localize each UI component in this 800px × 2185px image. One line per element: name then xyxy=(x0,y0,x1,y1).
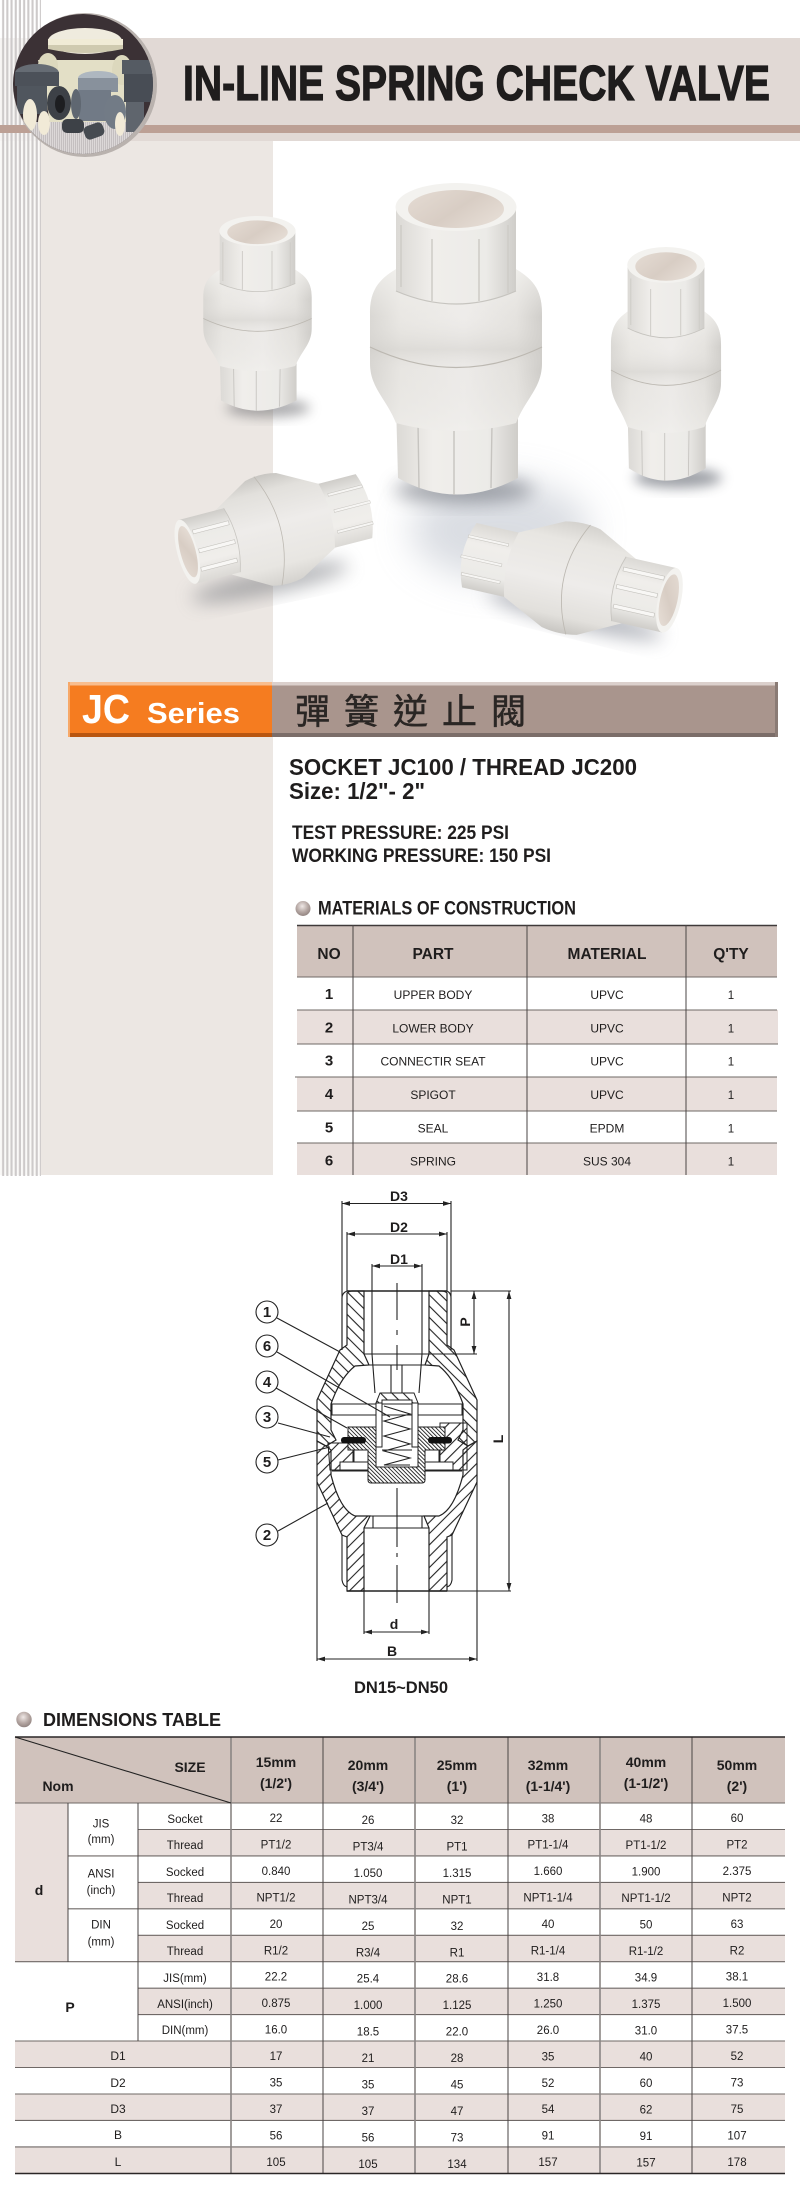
panel: header band xyxy=(0,38,800,141)
row: JIS socket: 26 xyxy=(362,1815,374,1827)
header row labels: 20mm xyxy=(348,1757,388,1773)
row: D2: 52 xyxy=(542,2078,554,2090)
left label columns: ANSI(inch) xyxy=(157,1999,213,2011)
row 3: 3 xyxy=(325,1053,333,1070)
soft shadows under valves xyxy=(189,399,722,648)
row: D2 xyxy=(270,2078,743,2092)
row: D1: 28 xyxy=(451,2053,463,2065)
row: D2: 60 xyxy=(640,2078,652,2090)
row: JIS socket xyxy=(270,1813,743,1827)
row 6: SUS 304 xyxy=(583,1155,631,1169)
header row labels: 40mm xyxy=(626,1754,666,1770)
left label columns: d xyxy=(35,1882,43,1898)
header row labels: (1-1/4') xyxy=(526,1778,570,1794)
row: JIS socket: 22 xyxy=(270,1813,282,1825)
row: DIN socked: 50 xyxy=(640,1920,652,1932)
row 4: SPIGOT xyxy=(410,1088,456,1102)
part number callouts: 3 xyxy=(263,1409,271,1426)
row: JIS thread: PT2 xyxy=(726,1839,748,1851)
dimension lines xyxy=(317,1188,511,1661)
row: DIN thread: R1/2 xyxy=(264,1945,288,1957)
row: JIS socket: 60 xyxy=(731,1813,743,1825)
row: D3: 37 xyxy=(362,2106,374,2118)
row 1 xyxy=(325,986,734,1003)
row 2: 2 xyxy=(325,1019,333,1036)
row: P ANSI: 1.500 xyxy=(723,1998,751,2010)
row: D2: 45 xyxy=(451,2080,463,2092)
left label columns: P xyxy=(65,1999,75,2015)
row 1: UPPER BODY xyxy=(394,988,472,1002)
left label columns: ANSI xyxy=(88,1869,114,1881)
row: DIN socked: 63 xyxy=(731,1919,743,1931)
row 6: SPRING xyxy=(410,1155,456,1169)
row: JIS thread: PT1-1/2 xyxy=(626,1840,666,1852)
row: DIN socked xyxy=(270,1919,743,1933)
row: ANSI socked: 1.660 xyxy=(534,1866,562,1878)
row: ANSI thread: NPT3/4 xyxy=(348,1894,388,1906)
row: D1: 40 xyxy=(640,2052,652,2064)
table shading xyxy=(15,1737,785,2173)
row: JIS thread: PT1-1/4 xyxy=(528,1840,569,1852)
row: ANSI socked xyxy=(262,1866,751,1880)
row: B: 91 xyxy=(542,2131,554,2143)
row: B xyxy=(270,2130,747,2144)
left label columns: (inch) xyxy=(87,1885,116,1897)
header row labels: (3/4') xyxy=(352,1778,384,1794)
left label columns: Socket xyxy=(167,1814,203,1826)
row: D3: 62 xyxy=(640,2105,652,2117)
table header row xyxy=(317,946,749,963)
row: P DIN: 16.0 xyxy=(265,2025,287,2037)
row 3 xyxy=(325,1053,734,1070)
row: ANSI socked: 1.050 xyxy=(354,1868,382,1880)
table header row: Q'TY xyxy=(713,946,749,963)
row: P JIS xyxy=(265,1972,748,1986)
row 5: 1 xyxy=(728,1123,734,1135)
row: DIN thread xyxy=(264,1945,744,1959)
dimension lines: D2 xyxy=(390,1219,408,1235)
row: ANSI thread: NPT1-1/4 xyxy=(523,1893,573,1905)
left label columns: Thread xyxy=(167,1893,203,1905)
header row labels: (1/2') xyxy=(260,1775,292,1791)
row: D3: 47 xyxy=(451,2106,463,2118)
row: DIN socked: 40 xyxy=(542,1919,554,1931)
row 2 xyxy=(325,1019,734,1036)
row 5: SEAL xyxy=(418,1121,449,1135)
part number callouts: 6 xyxy=(263,1338,271,1355)
banner: orange JC Series: JC xyxy=(82,686,130,732)
valve: large upright xyxy=(370,183,542,495)
row 1: 1 xyxy=(325,986,333,1003)
row: ANSI thread: NPT2 xyxy=(722,1892,752,1904)
dimension lines: L xyxy=(490,1434,506,1443)
row: P JIS: 31.8 xyxy=(537,1972,559,1984)
spec text block: SOCKET JC100 / THREAD JC200 xyxy=(289,754,637,780)
series banner xyxy=(68,682,778,737)
left label columns: Thread xyxy=(167,1840,203,1852)
row: D1: 17 xyxy=(270,2051,282,2063)
row: P DIN: 22.0 xyxy=(446,2027,468,2039)
row: P ANSI: 1.375 xyxy=(632,1999,660,2011)
row 4: 4 xyxy=(325,1086,334,1103)
row 2: UPVC xyxy=(590,1021,624,1035)
dimension lines: P xyxy=(457,1317,473,1327)
row: DIN socked: 25 xyxy=(362,1921,374,1933)
row: D2: 35 xyxy=(270,2078,282,2090)
row: P DIN: 31.0 xyxy=(635,2025,657,2037)
row: ANSI socked: 1.900 xyxy=(632,1867,660,1879)
spec text block xyxy=(289,754,637,867)
row: JIS socket: 38 xyxy=(542,1813,554,1825)
row: L: 105 xyxy=(266,2157,286,2169)
dimensions table xyxy=(15,1737,785,2174)
left label columns: (mm) xyxy=(88,1834,115,1846)
row 3: CONNECTIR SEAT xyxy=(380,1055,486,1069)
row: D3 xyxy=(270,2104,743,2118)
row 3: 1 xyxy=(728,1057,734,1069)
header row labels xyxy=(42,1754,757,1794)
left label columns: B xyxy=(114,2128,122,2142)
banner: orange JC Series: Series xyxy=(147,698,240,730)
row: DIN socked: 20 xyxy=(270,1919,282,1931)
row: D3: 75 xyxy=(731,2104,743,2116)
row: P JIS: 25.4 xyxy=(357,1974,380,1986)
row 6 xyxy=(325,1153,734,1170)
row: DIN thread: R3/4 xyxy=(356,1947,381,1959)
row 5: 5 xyxy=(325,1119,333,1136)
left label columns: Thread xyxy=(167,1946,203,1958)
spec text block: TEST PRESSURE: 225 PSI xyxy=(292,823,509,844)
row: B: 56 xyxy=(362,2132,374,2144)
row: P DIN: 18.5 xyxy=(357,2027,379,2039)
left label columns: D1 xyxy=(110,2049,126,2063)
row: DIN thread: R2 xyxy=(730,1945,744,1957)
dimension lines: D1 xyxy=(390,1251,408,1267)
row: DIN socked: 32 xyxy=(451,1921,463,1933)
dimension lines: B xyxy=(387,1643,397,1659)
panel: left beige column xyxy=(0,141,273,1175)
row: L: 134 xyxy=(447,2159,467,2171)
header row labels: 25mm xyxy=(437,1757,477,1773)
left label columns xyxy=(35,1814,213,2169)
banner: grey-brown Chinese title: 彈簧逆止閥 xyxy=(295,693,526,732)
left label columns: D3 xyxy=(110,2102,126,2116)
row: B: 91 xyxy=(640,2131,652,2143)
row: JIS thread: PT1/2 xyxy=(261,1839,291,1851)
drawing caption: DN15~DN50 xyxy=(354,1679,448,1697)
left label columns: Socked xyxy=(166,1920,204,1932)
header row labels: 32mm xyxy=(528,1757,568,1773)
table header row: NO xyxy=(317,946,341,963)
valve: small upright xyxy=(203,216,312,411)
header row labels: SIZE xyxy=(174,1759,206,1775)
header row labels: (2') xyxy=(727,1778,747,1794)
part number callouts: 2 xyxy=(263,1527,271,1544)
banner: grey-brown Chinese title xyxy=(272,682,778,737)
row: JIS thread: PT1 xyxy=(446,1841,468,1853)
row 5: EPDM xyxy=(590,1121,624,1135)
header row labels: 50mm xyxy=(717,1757,757,1773)
row: P ANSI xyxy=(262,1998,751,2012)
dimension lines: D3 xyxy=(390,1188,408,1204)
row: D1 xyxy=(270,2051,743,2065)
row: D2: 35 xyxy=(362,2080,374,2092)
row 3: UPVC xyxy=(590,1055,624,1069)
row 2: LOWER BODY xyxy=(392,1021,474,1035)
row 4: UPVC xyxy=(590,1088,624,1102)
row: ANSI socked: 1.315 xyxy=(443,1868,471,1880)
row: ANSI socked: 2.375 xyxy=(723,1866,751,1878)
heading: materials of construction: MATERIALS OF CONSTRUCTION xyxy=(318,898,576,920)
spring xyxy=(384,1406,410,1465)
row: D1: 35 xyxy=(542,2051,554,2063)
header strip xyxy=(0,125,800,133)
left label columns: DIN(mm) xyxy=(162,2025,208,2037)
table header row: PART xyxy=(412,946,454,963)
row: L: 178 xyxy=(727,2157,747,2169)
header row labels: 15mm xyxy=(256,1754,296,1770)
row: JIS socket: 48 xyxy=(640,1814,652,1826)
row: D1: 52 xyxy=(731,2051,743,2063)
panel: vertical stripe column xyxy=(0,0,41,1176)
row: ANSI thread: NPT1/2 xyxy=(256,1892,296,1904)
left label columns: JIS xyxy=(93,1819,110,1831)
row: DIN thread: R1-1/2 xyxy=(629,1946,663,1958)
banner: orange JC Series xyxy=(68,682,272,737)
row: D2: 73 xyxy=(731,2078,743,2090)
table header row: MATERIAL xyxy=(568,946,646,963)
left label columns: L xyxy=(115,2155,122,2169)
row: D1: 21 xyxy=(362,2053,374,2065)
seals xyxy=(341,1437,452,1444)
valve: lying right xyxy=(449,499,693,658)
row: L xyxy=(266,2157,747,2171)
left label columns: Socked xyxy=(166,1867,204,1879)
row: ANSI socked: 0.840 xyxy=(262,1866,290,1878)
row: P DIN: 37.5 xyxy=(726,2025,748,2037)
row: P JIS: 22.2 xyxy=(265,1972,287,1984)
row: B: 107 xyxy=(727,2130,747,2142)
valve: lying left xyxy=(163,450,385,609)
part number callouts: 4 xyxy=(263,1374,272,1391)
header product photo circle xyxy=(10,10,160,160)
left label columns: JIS(mm) xyxy=(163,1973,207,1985)
row: DIN thread: R1-1/4 xyxy=(531,1946,566,1958)
row: P DIN xyxy=(265,2025,748,2039)
row 6: 6 xyxy=(325,1153,333,1170)
row: D3: 54 xyxy=(542,2104,555,2116)
row: P JIS: 38.1 xyxy=(726,1972,748,1984)
row 6: 1 xyxy=(728,1157,734,1169)
left label columns: DIN xyxy=(91,1920,111,1932)
row: P ANSI: 1.125 xyxy=(443,2000,471,2012)
left label columns: (mm) xyxy=(88,1937,115,1949)
row: JIS thread xyxy=(261,1839,748,1853)
row: JIS thread: PT3/4 xyxy=(353,1841,384,1853)
row: P JIS: 34.9 xyxy=(635,1972,657,1984)
row: B: 73 xyxy=(451,2132,463,2144)
header row labels: Nom xyxy=(42,1778,74,1794)
row: ANSI thread: NPT1 xyxy=(442,1894,472,1906)
header row labels: (1') xyxy=(447,1778,467,1794)
row 4 xyxy=(325,1086,734,1103)
left label columns: D2 xyxy=(110,2076,126,2090)
cross-section technical drawing xyxy=(256,1188,511,1697)
spec text block: WORKING PRESSURE: 150 PSI xyxy=(292,846,551,867)
row: DIN thread: R1 xyxy=(450,1947,464,1959)
row: D3: 37 xyxy=(270,2104,282,2116)
valve: right upright xyxy=(611,247,721,481)
row: ANSI thread xyxy=(256,1892,752,1906)
product photo: five white valves xyxy=(163,183,722,658)
row: P DIN: 26.0 xyxy=(537,2025,559,2037)
row: P ANSI: 1.000 xyxy=(354,2000,382,2012)
row: B: 56 xyxy=(270,2130,282,2142)
row 5 xyxy=(325,1119,734,1136)
row: ANSI thread: NPT1-1/2 xyxy=(621,1893,671,1905)
header row labels: (1-1/2') xyxy=(624,1775,668,1791)
row: P JIS: 28.6 xyxy=(446,1974,468,1986)
row: L: 105 xyxy=(358,2159,378,2171)
row 2: 1 xyxy=(728,1023,734,1035)
valve section body xyxy=(317,1283,477,1603)
row: JIS socket: 32 xyxy=(451,1815,463,1827)
part number callouts: 1 xyxy=(263,1304,271,1321)
part number callouts: 5 xyxy=(263,1454,271,1471)
heading: dimensions table: DIMENSIONS TABLE xyxy=(43,1709,221,1730)
spec text block: Size: 1/2"- 2" xyxy=(289,778,425,804)
row 1: UPVC xyxy=(590,988,624,1002)
row 4: 1 xyxy=(728,1090,734,1102)
row: P ANSI: 1.250 xyxy=(534,1998,562,2010)
materials table xyxy=(295,925,778,1175)
row: L: 157 xyxy=(538,2157,558,2169)
row: L: 157 xyxy=(636,2158,656,2170)
row 1: 1 xyxy=(728,990,734,1002)
part number callouts xyxy=(256,1301,390,1546)
row: P ANSI: 0.875 xyxy=(262,1998,290,2010)
dimension lines: d xyxy=(390,1616,398,1632)
